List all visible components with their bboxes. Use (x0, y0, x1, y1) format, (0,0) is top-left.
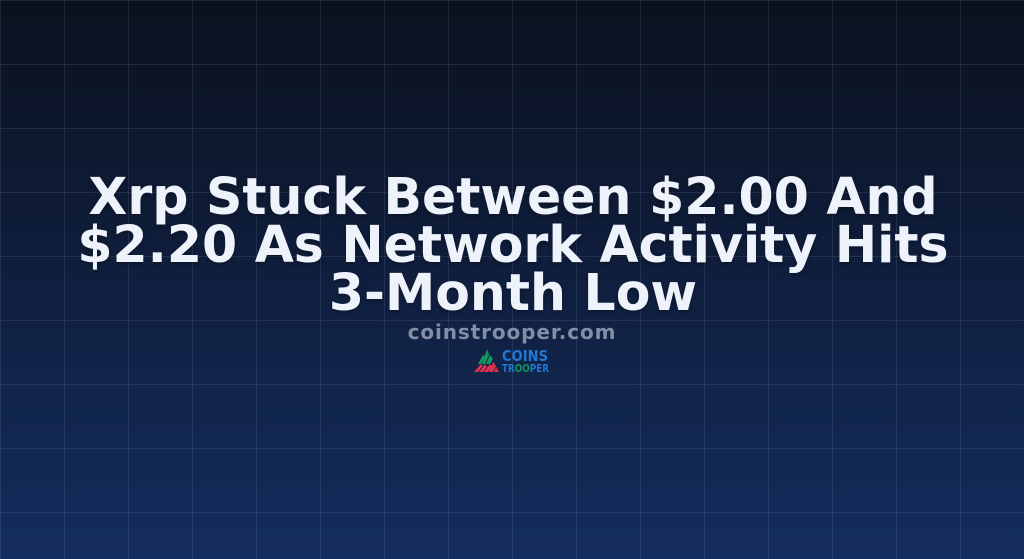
title: $2.20 As Network Activity Hits (77, 215, 949, 274)
website label: coinstrooper.com (408, 320, 616, 344)
icon: green and red chart peaks (474, 349, 499, 372)
title: 3-Month Low (329, 263, 697, 322)
logo: Coins Trooper (474, 347, 549, 375)
title: Xrp Stuck Between $2.00 And (88, 167, 938, 226)
title (77, 167, 949, 322)
